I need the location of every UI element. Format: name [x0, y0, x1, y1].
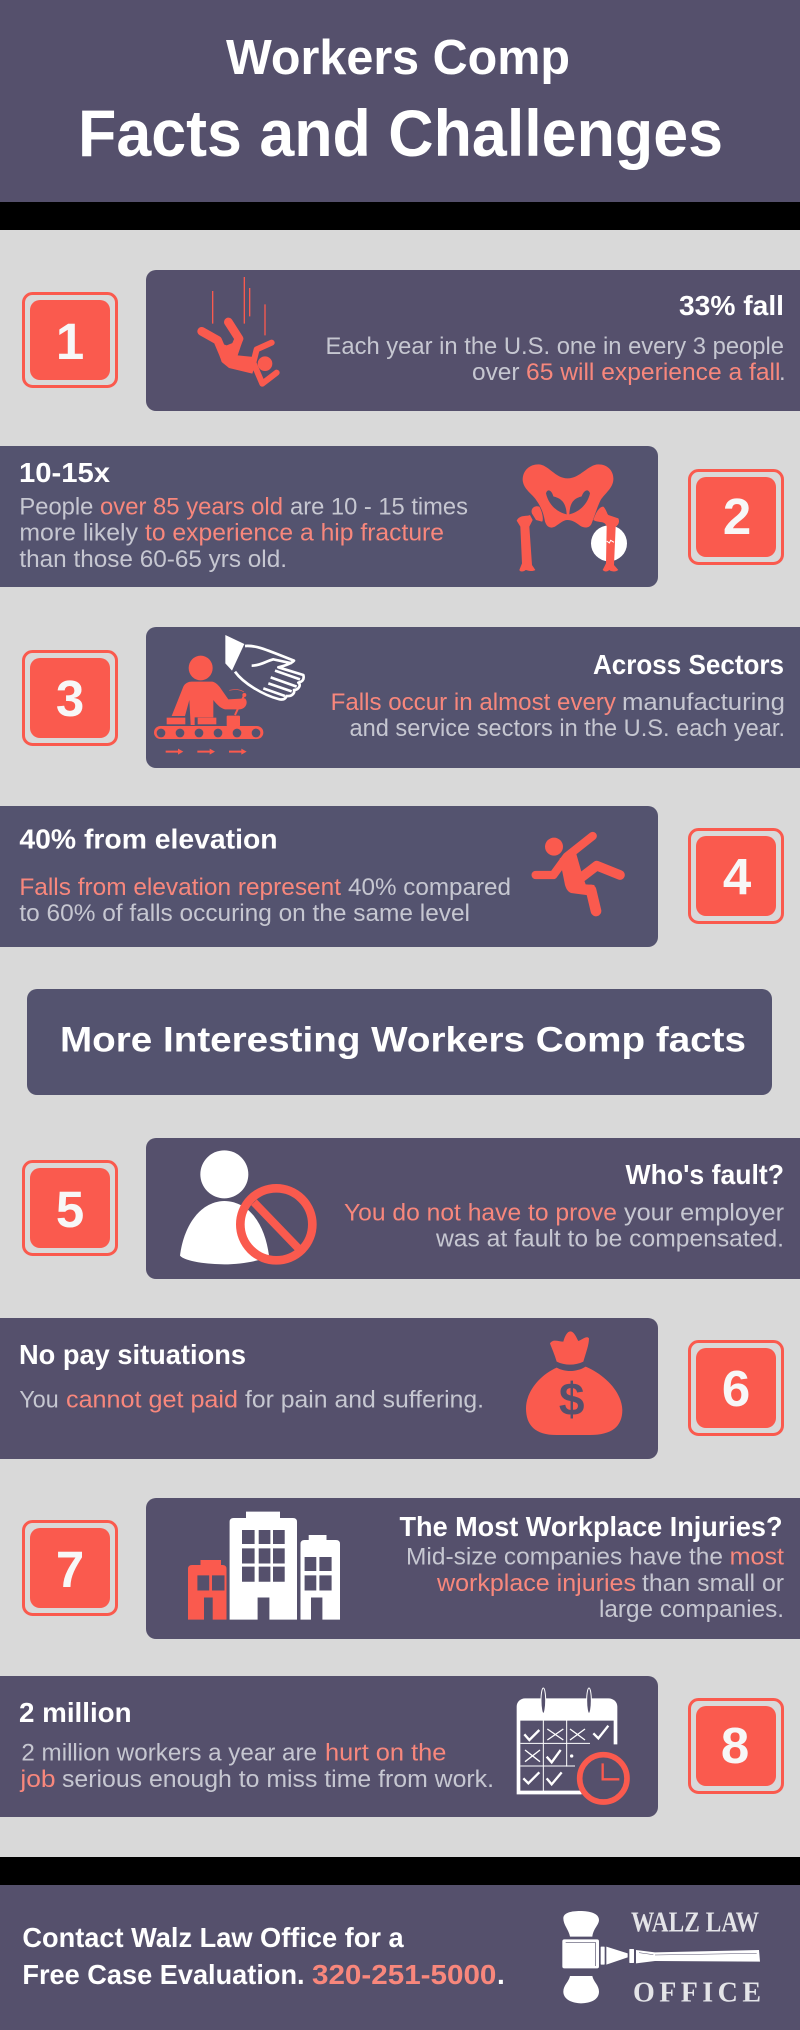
badge 2: 2 [723, 488, 751, 545]
contact text: Free Case Evaluation. [22, 1959, 305, 1990]
badge 2 [690, 470, 782, 564]
heading: 10-15x [19, 457, 110, 488]
text block: Each year in the U.S. one in every 3 people [326, 333, 784, 360]
text block: cannot get paid [66, 1387, 238, 1414]
badge 4: 4 [723, 848, 752, 905]
text block [19, 494, 468, 573]
badge 8: 8 [721, 1717, 749, 1774]
text block [19, 874, 511, 927]
text block: than those 60-65 yrs old. [19, 546, 287, 573]
contact text: . [497, 1959, 505, 1990]
heading: Across Sectors [593, 649, 784, 680]
text block: to 60% of falls occuring on the same level [19, 900, 470, 927]
text block: for pain and suffering. [245, 1387, 484, 1414]
text block: was at fault to be compensated. [435, 1226, 784, 1253]
panel: fact 3 [146, 627, 800, 768]
badge 8 [690, 1700, 782, 1792]
text block: 65 will experience a fall [526, 359, 780, 386]
text block: than small or [642, 1570, 784, 1597]
logo text [631, 1908, 761, 2009]
text block [326, 333, 786, 386]
text block: most [730, 1544, 784, 1570]
text block: Mid-size companies have the [406, 1544, 723, 1570]
badge 5: 5 [56, 1181, 84, 1238]
text block: and service sectors in the U.S. each year. [350, 715, 785, 742]
text block: You do not have to prove [344, 1200, 617, 1227]
text block [331, 689, 785, 742]
footer band [0, 1885, 800, 2030]
panel: fact 1 [146, 270, 800, 411]
badge 3: 3 [56, 670, 84, 727]
text block: workplace injuries [436, 1570, 636, 1597]
panel: fact 8 [0, 1676, 658, 1817]
badge 6: 6 [722, 1360, 750, 1417]
icon: falling person [202, 277, 277, 384]
heading: Who's fault? [626, 1159, 784, 1190]
icon: money bag: $ [559, 1373, 584, 1425]
panel: fact 2 [0, 446, 658, 587]
heading: 33% fall [679, 290, 784, 321]
text block: more likely [19, 520, 138, 547]
icon: slipping person [536, 836, 620, 911]
heading: No pay situations [19, 1339, 246, 1370]
text block: Falls from elevation represent [19, 874, 341, 901]
badge 5 [24, 1162, 116, 1254]
panel: fact 6 [0, 1318, 658, 1459]
text block: over 85 years old [100, 494, 283, 521]
panel: fact 5 [146, 1138, 800, 1279]
title line 2: Facts and Challenges [78, 96, 723, 170]
contact text: Contact Walz Law Office for a [22, 1922, 404, 1953]
text block: manufacturing [622, 689, 785, 716]
panel: fact 4 [0, 806, 658, 947]
icon: factory worker and handshake [154, 635, 304, 755]
text block [19, 1740, 494, 1793]
text block: over [472, 359, 520, 386]
text block: hurt on the [325, 1740, 446, 1767]
badge 6 [690, 1342, 782, 1434]
icon: person with prohibition sign [180, 1150, 312, 1264]
heading: 40% from elevation [19, 824, 278, 855]
icon: money bag [526, 1331, 622, 1435]
badge 1 [24, 294, 116, 386]
logo text: WALZ LAW [631, 1908, 759, 1939]
text block: to experience a hip fracture [145, 520, 444, 547]
text block: large companies. [599, 1596, 784, 1623]
text block [344, 1200, 784, 1253]
icon: hip fracture [517, 464, 627, 572]
text block: 40% compared [348, 874, 511, 901]
heading: The Most Workplace Injuries? [400, 1511, 782, 1542]
text block: 2 million workers a year are [21, 1740, 317, 1767]
text block: People [19, 494, 93, 521]
badge 7: 7 [56, 1541, 84, 1598]
text block: job [19, 1766, 56, 1793]
text block: You [19, 1387, 59, 1414]
text block: serious enough to miss time from work. [62, 1766, 494, 1793]
badge 7 [24, 1522, 116, 1614]
icon: calendar and clock [517, 1688, 627, 1802]
text block: . [779, 359, 786, 386]
text block: Falls occur in almost every [331, 689, 616, 716]
badge 1: 1 [56, 313, 84, 370]
heading: 2 million [19, 1697, 132, 1728]
text block: are 10 - 15 times [290, 494, 468, 521]
logo text: OFFICE [633, 1978, 761, 2009]
badge 4 [690, 830, 782, 922]
badge 3 [24, 652, 116, 744]
icon: gavel logo [562, 1911, 760, 2003]
banner: more facts heading: More Interesting Workers Comp facts [60, 1021, 746, 1060]
text block: your employer [624, 1200, 784, 1227]
icon: office buildings [188, 1512, 340, 1620]
text block [406, 1544, 784, 1623]
contact text [22, 1922, 505, 1990]
text block [19, 1387, 484, 1414]
panel: fact 7 [146, 1498, 800, 1639]
title line 1: Workers Comp [226, 31, 570, 85]
header band [0, 0, 800, 202]
banner: more facts heading [27, 989, 772, 1095]
contact text: 320-251-5000 [312, 1959, 496, 1990]
